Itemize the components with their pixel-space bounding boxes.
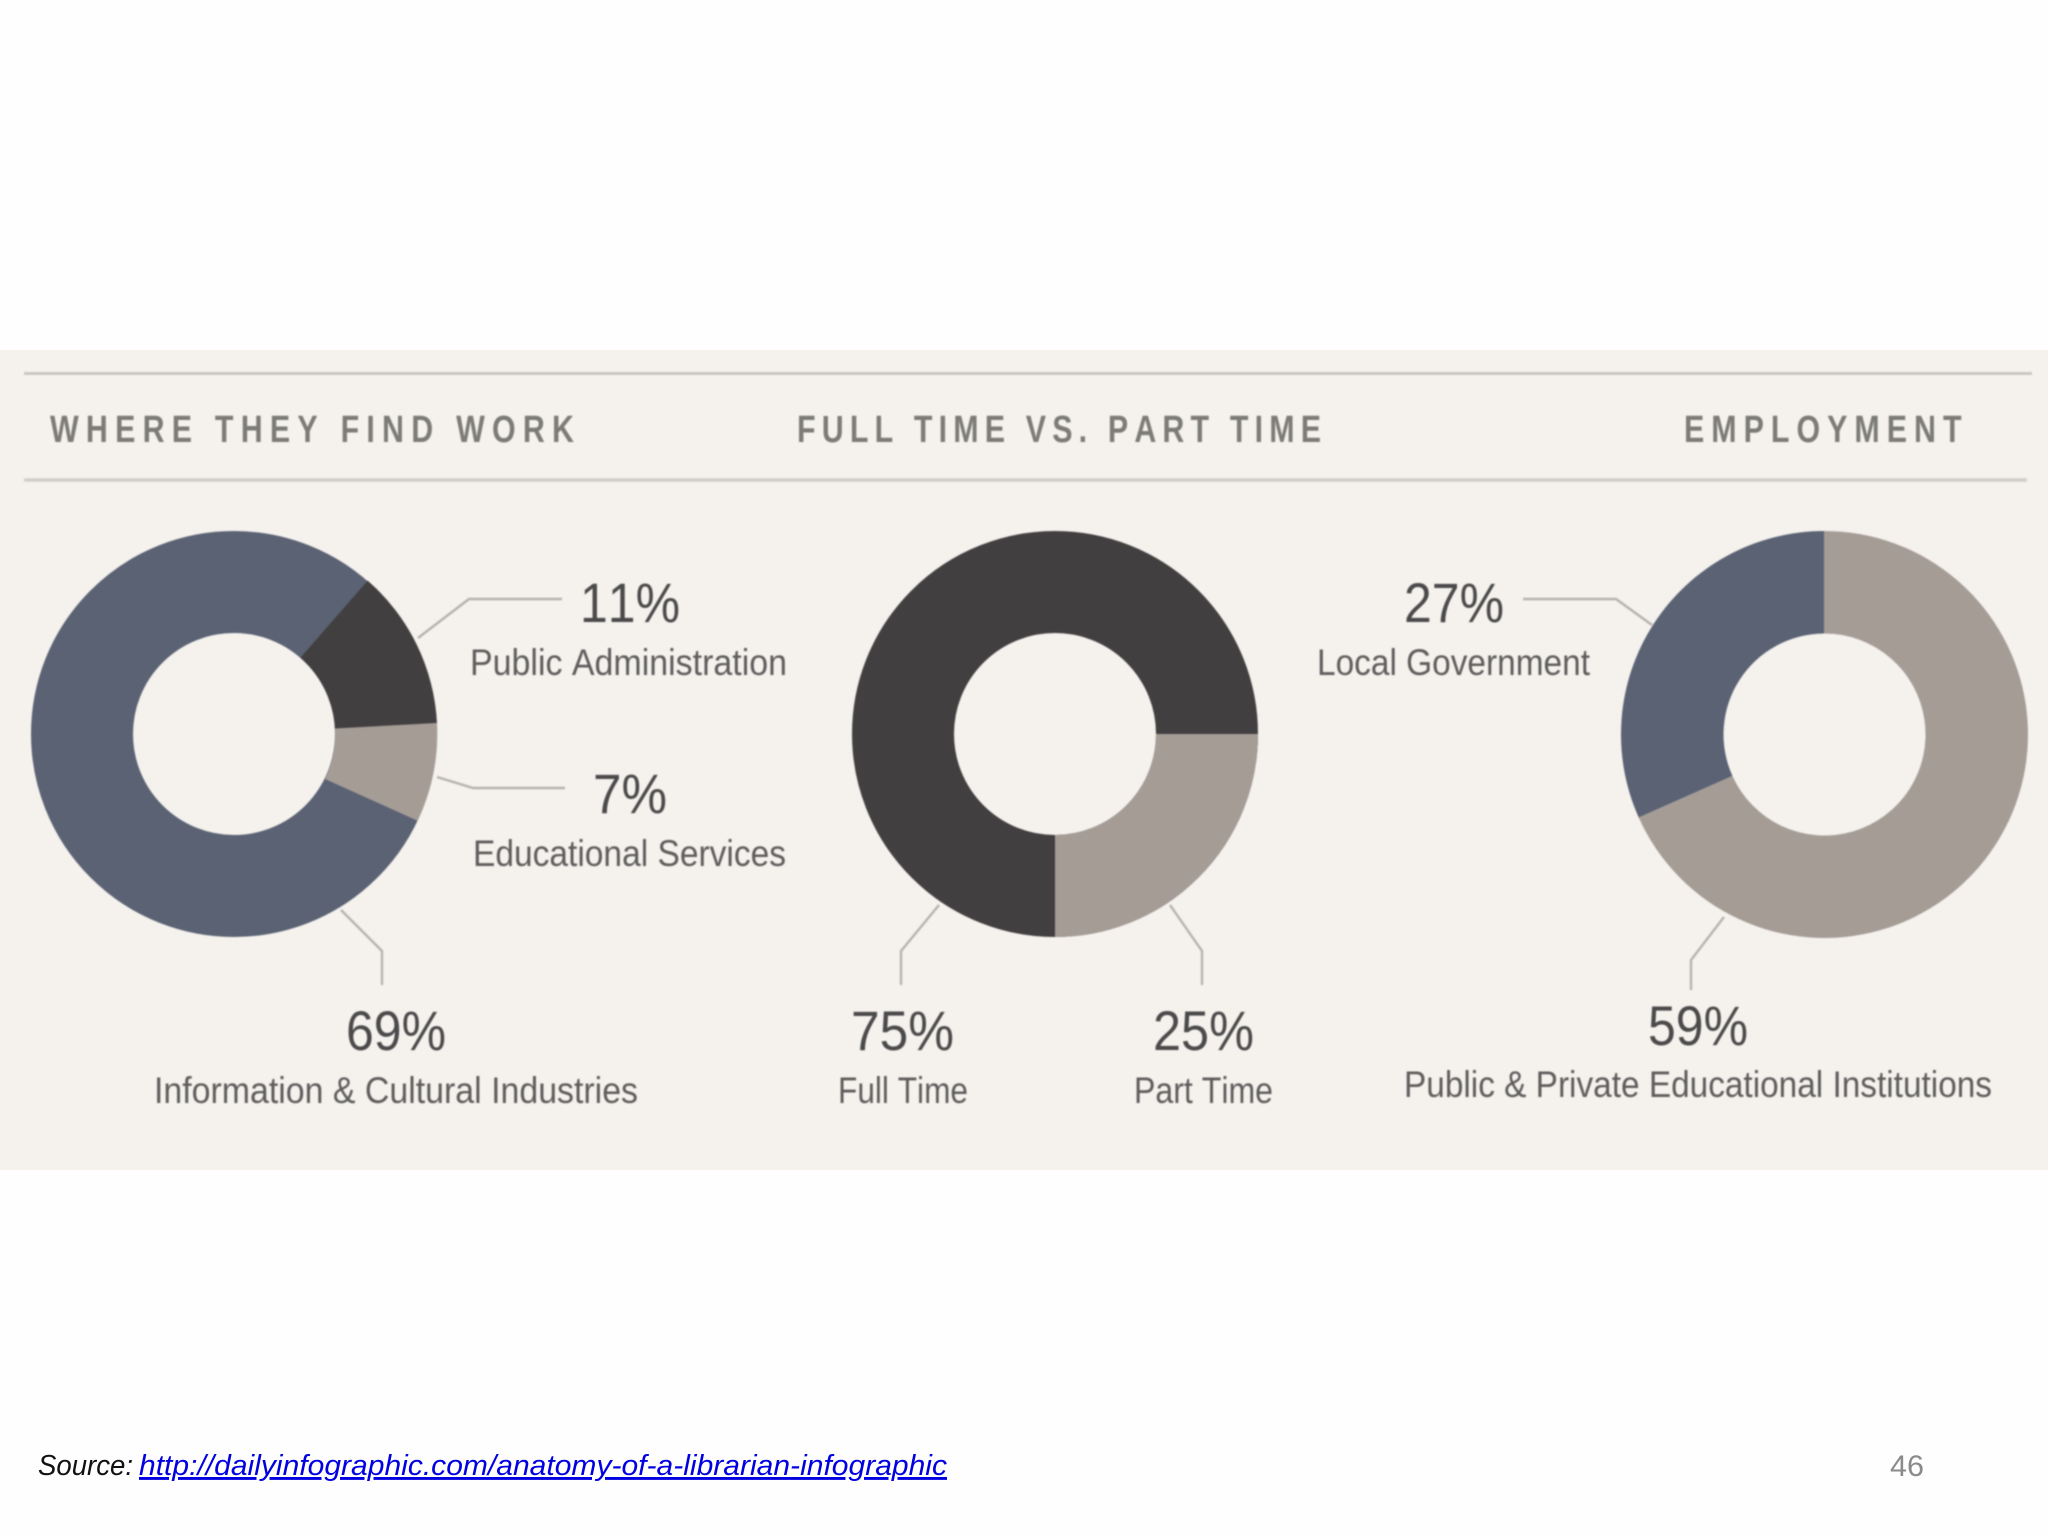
callout: 75% full time — [838, 905, 968, 1111]
callout: 59% public and private educational institutions — [1404, 917, 1992, 1105]
source citation: Source: — [38, 1450, 133, 1482]
donut chart: employment — [1621, 531, 2028, 938]
callout: 27% local government — [1317, 571, 1652, 683]
callout: 69% information and cultural industries: 69% — [346, 999, 446, 1062]
callout: 7% educational services: 7% — [593, 762, 667, 825]
heading: employment: EMPLOYMENT — [1684, 409, 1962, 451]
donut chart: full time vs part time — [903, 582, 1258, 937]
callout: 59% public and private educational institutions: Public & Private Educational Institutions — [1404, 1064, 1992, 1105]
callout: 7% educational services: Educational Services — [473, 833, 786, 874]
callout: 59% public and private educational institutions: 59% — [1648, 994, 1748, 1057]
callout: 75% full time: Full Time — [838, 1070, 968, 1111]
callout: 27% local government: Local Government — [1317, 642, 1591, 683]
callout: 11% public administration — [418, 571, 787, 683]
callout: 25% part time — [1134, 905, 1273, 1111]
callout: 75% full time: 75% — [851, 999, 954, 1062]
section header band — [24, 374, 2032, 480]
callout: 27% local government: 27% — [1404, 571, 1504, 634]
callout: 25% part time: 25% — [1153, 999, 1254, 1062]
callout: 25% part time: Part Time — [1134, 1070, 1273, 1111]
page number: 46 — [1890, 1450, 1924, 1483]
source citation: http://dailyinfographic.com/anatomy-of-a-librarian-infographic — [139, 1450, 948, 1482]
heading: full time vs part time: FULL TIME VS. PART TIME — [797, 409, 1321, 451]
callout: 69% information and cultural industries — [154, 910, 638, 1111]
donut chart: where they find work — [82, 581, 437, 886]
callout: 7% educational services — [437, 762, 786, 874]
callout: 11% public administration: Public Administration — [470, 642, 787, 683]
panel: employment — [1317, 531, 2028, 1105]
panel: full time vs part time — [838, 582, 1273, 1111]
callout: 69% information and cultural industries: Information & Cultural Industries — [154, 1070, 638, 1111]
heading: where they find work: WHERE THEY FIND WORK — [50, 409, 574, 451]
callout: 11% public administration: 11% — [580, 571, 680, 634]
panel: where they find work — [82, 571, 787, 1111]
panel: infographic background — [0, 350, 2048, 1170]
